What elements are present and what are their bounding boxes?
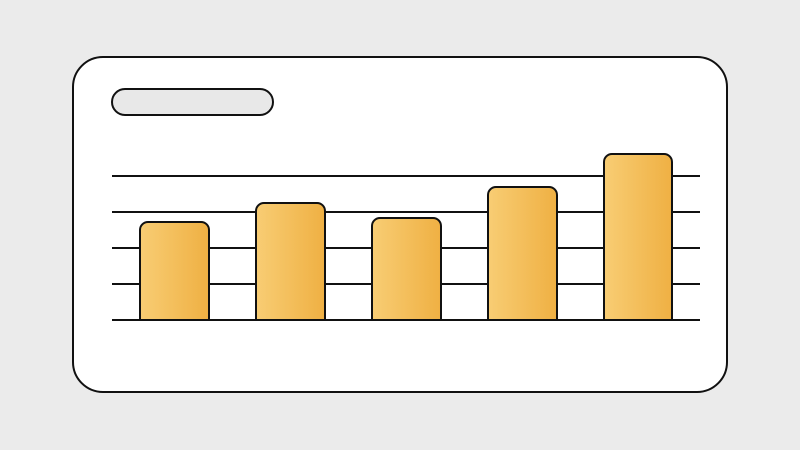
bar chart: [140, 154, 672, 320]
title placeholder pill: [112, 89, 273, 115]
panel: card: [73, 57, 727, 392]
